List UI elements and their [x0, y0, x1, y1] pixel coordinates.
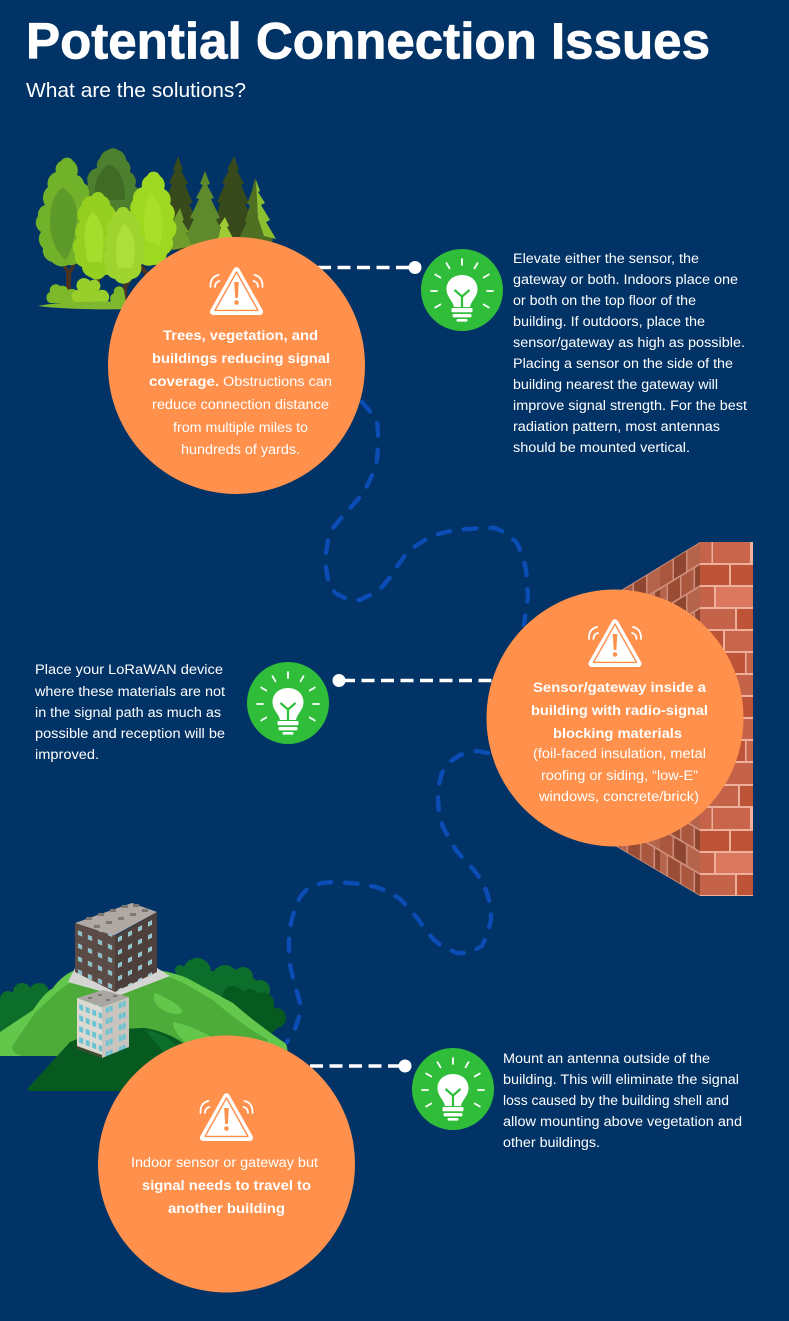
- dashed path: second to third issue: [287, 751, 491, 1042]
- text: solution 1: sensor/gateway as high as possible.: [513, 335, 745, 351]
- icon: lightbulb solution 3: [412, 1048, 494, 1130]
- subtitle: What are the solutions?: [26, 79, 246, 102]
- dashed path: first to second issue: [326, 402, 528, 625]
- light green hill: [0, 970, 287, 1056]
- wall front: [700, 542, 753, 896]
- icon: warning: [589, 622, 641, 664]
- text: solution 2: possible and reception will be: [35, 726, 225, 742]
- text: solution 1: building. If outdoors, place the: [513, 314, 705, 330]
- text: solution 1: improve signal strength. For the best: [513, 398, 747, 414]
- text: solution 1: building nearest the gateway will: [513, 377, 718, 393]
- text: solution 2: in the signal path as much as: [35, 705, 221, 721]
- text: solution 1: Elevate either the sensor, the: [513, 251, 699, 267]
- text: solution 1: should be mounted vertical.: [513, 440, 690, 456]
- text: solution 3: building. This will eliminate the signal: [503, 1072, 739, 1088]
- title: Potential Connection Issues: [26, 12, 710, 70]
- panel: issue 1 circle: [108, 237, 365, 494]
- light building: [77, 990, 129, 1058]
- icon: lightbulb solution 1: [421, 249, 503, 331]
- panel: issue 2 circle: [486, 590, 744, 846]
- text: solution 1: Placing a sensor on the side of the: [513, 356, 733, 372]
- dark building: [75, 903, 157, 992]
- text: solution 1: gateway or both. Indoors place one: [513, 272, 738, 288]
- tree trunks: [60, 262, 149, 303]
- connector: second issue to solution: [332, 674, 492, 687]
- front tree: [104, 207, 145, 284]
- illustration: hill with buildings: [0, 903, 287, 1091]
- text: solution 3: Mount an antenna outside of the: [503, 1051, 710, 1067]
- icon: lightbulb solution 2: [247, 662, 329, 744]
- middle tree: [73, 192, 118, 280]
- connector: first issue to solution: [318, 261, 422, 274]
- dark leafy tree: [85, 148, 140, 225]
- background bushes: [0, 958, 270, 1035]
- wall side: [600, 542, 700, 719]
- shrubs: [46, 278, 126, 303]
- issue 1 text: coverage.: [149, 374, 219, 390]
- text: solution 3: other buildings.: [503, 1135, 600, 1151]
- issue 3 text: signal needs to travel to: [142, 1178, 311, 1194]
- issue 1 text: hundreds of yards.: [181, 442, 300, 458]
- icon: warning: [210, 270, 263, 312]
- icon: warning: [200, 1096, 253, 1138]
- illustration: forest: [36, 148, 276, 309]
- issue 2 text: blocking materials: [553, 726, 682, 742]
- issue 3 text: Indoor sensor or gateway but: [131, 1155, 318, 1171]
- issue 2 text: building with radio-signal: [531, 703, 708, 719]
- panel: issue 3 circle: [98, 1036, 355, 1292]
- mid green hill shading: [12, 974, 270, 1056]
- text: solution 3: [503, 1051, 742, 1151]
- issue 1 text: Trees, vegetation, and: [163, 328, 318, 344]
- issue 2 text: roofing or siding, “low-E”: [541, 768, 698, 784]
- issue 1 text: [149, 328, 332, 458]
- text: solution 2: [34, 662, 225, 763]
- right light tree: [130, 172, 177, 266]
- issue 2 text: Sensor/gateway inside a: [533, 680, 706, 696]
- text: solution 3: loss caused by the building shell and: [503, 1093, 729, 1109]
- pine trees: [156, 156, 276, 252]
- illustration: brick wall: [600, 542, 753, 896]
- issue 2 text: (foil-faced insulation, metal: [533, 746, 706, 762]
- ground: [38, 301, 135, 309]
- issue 1 text: reduce connection distance: [152, 397, 329, 413]
- issue 1 text: buildings reducing signal: [152, 351, 330, 367]
- connector: third issue to solution: [310, 1060, 412, 1072]
- text: solution 2: Place your LoRaWAN device: [35, 662, 223, 678]
- text: solution 1: [513, 251, 747, 456]
- text: solution 1: or both on the top floor of the: [513, 293, 696, 309]
- front dark hill: [28, 1028, 220, 1091]
- base slab: [68, 968, 170, 996]
- issue 3 text: [131, 1155, 318, 1217]
- text: solution 1: radiation pattern, most antennas: [513, 419, 720, 435]
- text: solution 2: improved.: [35, 747, 99, 763]
- issue 2 text: windows, concrete/brick): [538, 789, 699, 805]
- issue 3 text: another building: [168, 1201, 285, 1217]
- issue 2 text: [531, 680, 708, 805]
- issue 1 text: from multiple miles to: [173, 420, 308, 436]
- issue 1 text: Obstructions can: [223, 374, 332, 390]
- left tree: [36, 158, 94, 266]
- text: solution 3: allow mounting above vegetation and: [503, 1114, 742, 1130]
- text: solution 2: where these materials are not: [34, 684, 225, 700]
